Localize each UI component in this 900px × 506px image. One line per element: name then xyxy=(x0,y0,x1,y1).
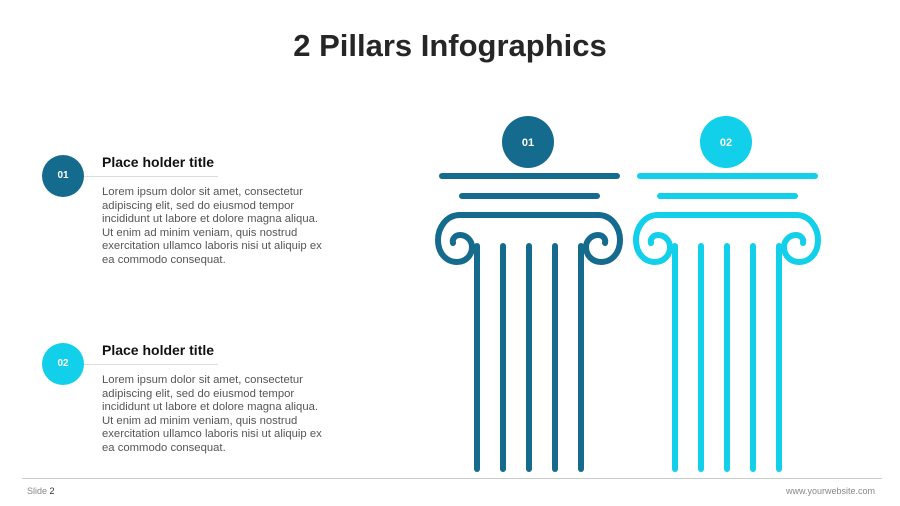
heading 02: Place holder title xyxy=(102,342,214,358)
icon: pillar circle 02 xyxy=(700,116,752,168)
icon: number circle 01: 01 xyxy=(57,170,69,181)
title: 2 Pillars Infographics xyxy=(293,28,607,63)
panel: item 01 xyxy=(42,154,322,266)
icon: pillar circle 01 xyxy=(502,116,554,168)
pillar 02 xyxy=(636,116,818,469)
icon: pillar circle 02: 02 xyxy=(720,137,732,149)
icon: number circle 02 xyxy=(42,343,84,385)
icon: pillar circle 01: 01 xyxy=(522,137,534,149)
heading 01: Place holder title xyxy=(102,154,214,170)
footer: website: www.yourwebsite.com xyxy=(786,486,875,496)
text block 01: Lorem ipsum dolor sit amet, consectetur adipiscing elit, sed do eiusmod tempor incididunt ut labore et dolore magna aliqua. Ut enim ad minim veniam, quis nostrud exercitation ullamco laboris nisi ut aliquip ex ea commodo consequat. xyxy=(102,186,322,266)
footer: slide number: Slide 2 xyxy=(27,486,55,496)
icon: number circle 01 xyxy=(42,155,84,197)
pillar 01 xyxy=(438,116,620,469)
panel: item 02 xyxy=(42,342,322,454)
icon: number circle 02: 02 xyxy=(57,358,69,369)
text block 02: Lorem ipsum dolor sit amet, consectetur adipiscing elit, sed do eiusmod tempor incididunt ut labore et dolore magna aliqua. Ut enim ad minim veniam, quis nostrud exercitation ullamco laboris nisi ut aliquip ex ea commodo consequat. xyxy=(102,374,322,454)
